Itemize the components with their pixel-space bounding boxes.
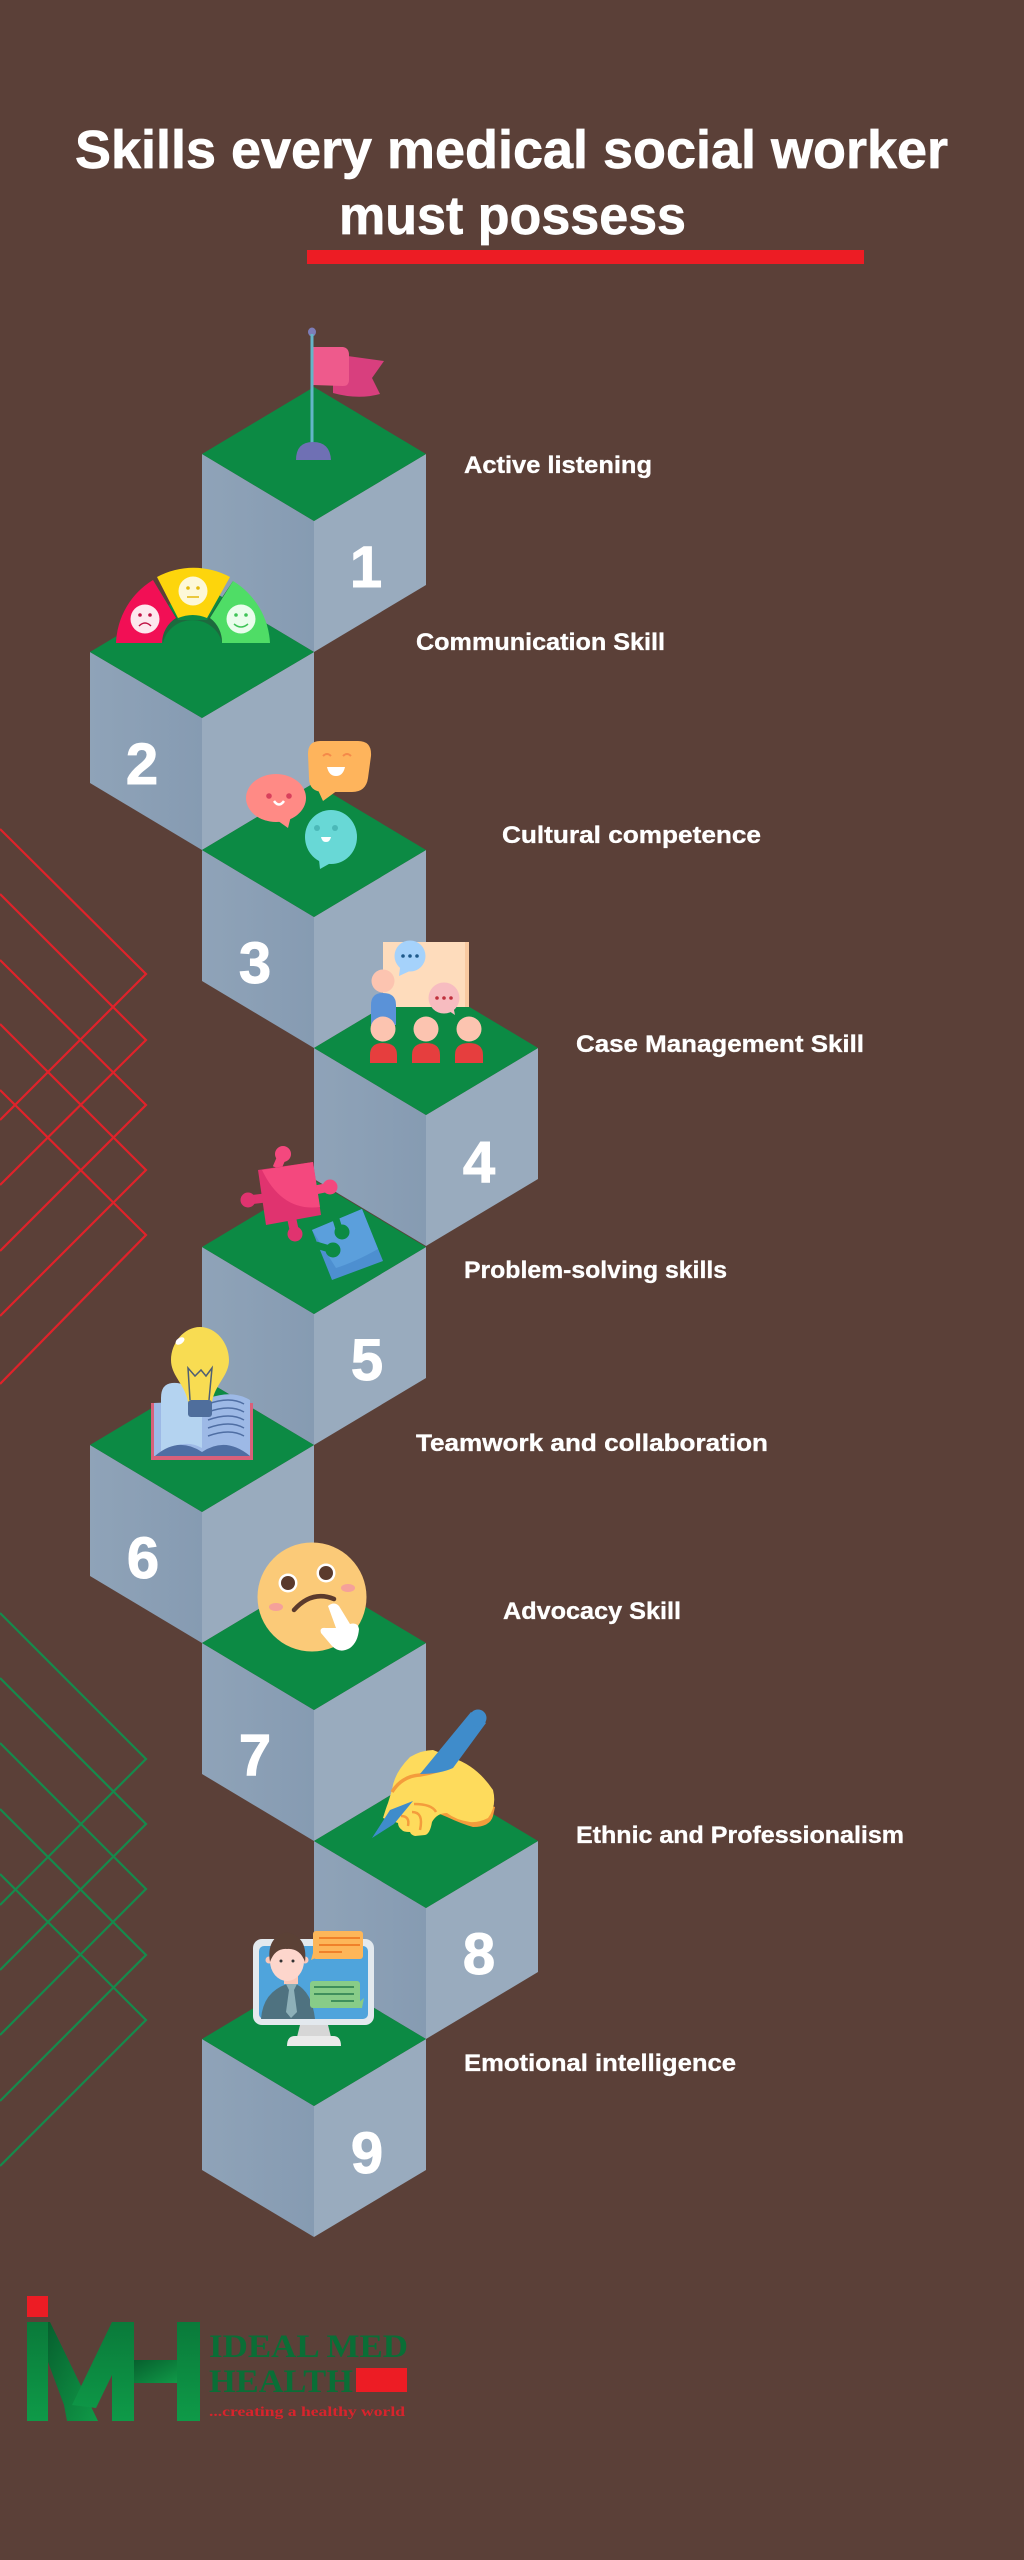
step 6 cube: 6 — [127, 1526, 159, 1591]
label: Active listening: Active listening — [464, 452, 652, 479]
label: Cultural competence: Cultural competence — [502, 822, 761, 849]
step 3 cube: 3 — [239, 931, 271, 996]
title — [75, 120, 948, 246]
label: Emotional intelligence: Emotional intelligence — [464, 2050, 736, 2077]
label: Problem-solving skills: Problem-solving skills — [464, 1257, 727, 1284]
step 5 cube — [202, 1180, 426, 1445]
step 9 cube — [202, 1972, 426, 2237]
label: Case Management Skill: Case Management Skill — [576, 1031, 864, 1058]
label: Communication Skill: Communication Skill — [416, 629, 665, 656]
step 7 cube: 7 — [239, 1723, 271, 1788]
logo: Ideal Med Health: ...creating a healthy world — [209, 2405, 405, 2420]
step 8 cube: 8 — [463, 1922, 495, 1987]
icon: chat bubbles — [246, 741, 371, 869]
logo: Ideal Med Health — [27, 2296, 408, 2421]
icon: puzzle pieces — [240, 1146, 383, 1280]
step 1 cube — [202, 387, 426, 652]
title underline — [307, 250, 864, 264]
step 9 cube: 9 — [351, 2121, 383, 2186]
step 4 cube — [314, 981, 538, 1246]
step 7 cube — [202, 1576, 426, 1841]
label: Ethnic and Professionalism: Ethnic and Professionalism — [576, 1822, 904, 1849]
icon: group discussion — [370, 940, 483, 1063]
step 3 cube — [202, 783, 426, 1048]
icon: book and light bulb — [151, 1327, 253, 1460]
step 2 cube: 2 — [126, 732, 158, 797]
label: Teamwork and collaboration: Teamwork and collaboration — [416, 1430, 768, 1457]
green chevron pattern — [0, 1613, 146, 2166]
logo: Ideal Med Health: IDEAL MED — [209, 2329, 408, 2365]
step 4 cube: 4 — [463, 1130, 495, 1195]
step 8 cube — [314, 1774, 538, 2039]
title: Skills every medical social worker — [75, 120, 948, 180]
logo: Ideal Med Health: HEALTH — [209, 2364, 353, 2400]
title: must possess — [339, 186, 686, 246]
icon: writing hand — [372, 1710, 495, 1838]
step 1 cube: 1 — [350, 535, 382, 600]
icon: flag — [296, 328, 384, 460]
icon: thinking face — [258, 1542, 366, 1652]
label: Advocacy Skill: Advocacy Skill — [503, 1598, 681, 1625]
icon: video call monitor — [253, 1931, 374, 2046]
step 2 cube — [90, 585, 314, 850]
red chevron pattern — [0, 829, 146, 1384]
step 5 cube: 5 — [351, 1328, 383, 1393]
step 6 cube — [90, 1378, 314, 1643]
icon: satisfaction gauge — [116, 568, 270, 643]
